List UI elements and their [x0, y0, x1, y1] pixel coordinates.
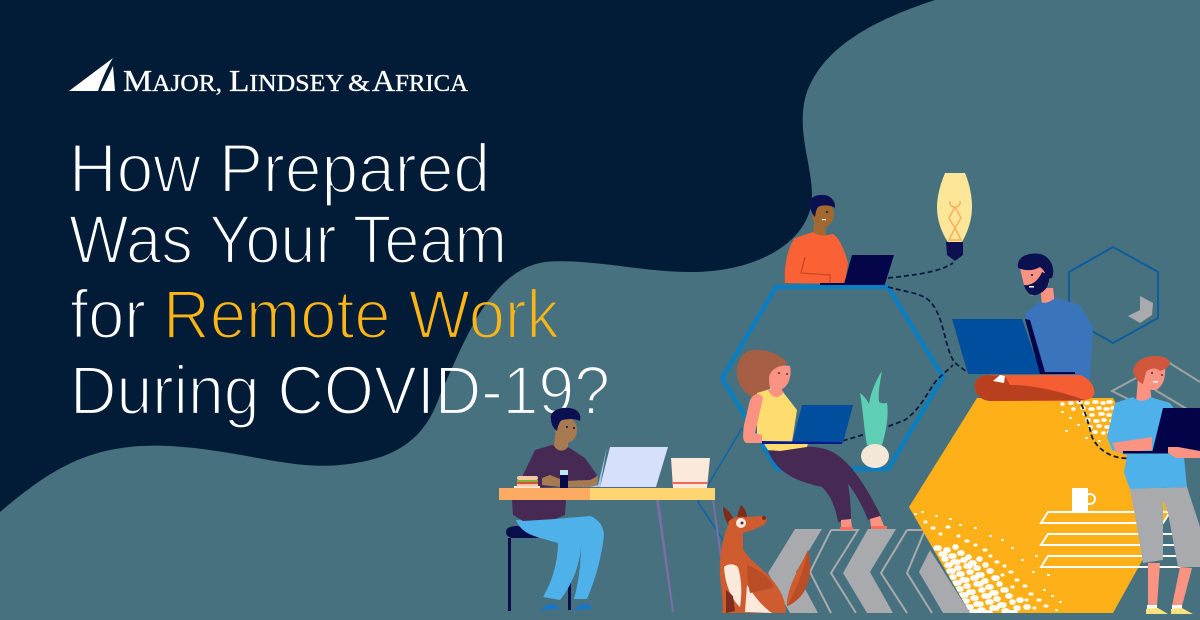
- logo wordmark: [123, 63, 469, 98]
- person: seated man at desk: [506, 408, 604, 611]
- neck and head: [554, 435, 568, 451]
- yellow hexagon: [909, 398, 1180, 613]
- desk: [499, 447, 722, 612]
- plant in pot: [860, 371, 889, 468]
- logo wordmark: MAJOR,: [123, 63, 222, 98]
- person: red-haired man standing with laptop: [1107, 356, 1200, 614]
- logo wordmark: LINDSEY: [229, 63, 344, 98]
- white speckles: [915, 402, 1113, 613]
- white coffee cup: [1072, 488, 1095, 511]
- person: woman on hexagon with laptop: [737, 350, 887, 530]
- title: for: [70, 276, 146, 353]
- title: Remote Work: [163, 276, 559, 353]
- small blue hexagon outline: [1069, 247, 1158, 343]
- title: During COVID-19?: [70, 352, 610, 429]
- shoes: [541, 604, 594, 610]
- arm: [542, 475, 598, 487]
- white desk stripes: [1041, 512, 1180, 567]
- grey chevron in small hexagon: [1128, 296, 1153, 323]
- cup: [671, 458, 710, 488]
- title: Was Your Team: [69, 201, 507, 278]
- person: bearded man cross-legged with laptop: [952, 254, 1094, 401]
- title: How Prepared: [69, 130, 490, 207]
- pants: [516, 516, 604, 600]
- fox dog: [720, 505, 810, 613]
- grey chevrons: [768, 529, 970, 613]
- shirt: [512, 445, 597, 521]
- person: man in orange with laptop: [785, 195, 894, 285]
- thin blue connector line: [698, 428, 742, 543]
- logo wordmark: AFRICA: [372, 63, 469, 98]
- light bulb: [937, 173, 972, 261]
- sandwich: [514, 476, 540, 488]
- laptop: [590, 447, 668, 487]
- dashed connectors: [835, 263, 1145, 458]
- logo wordmark: &: [348, 71, 370, 97]
- dark navy blob: [0, 0, 935, 512]
- blue hexagon outline: [722, 287, 943, 469]
- logo mark: sail: [69, 58, 115, 91]
- title: [69, 130, 610, 429]
- stool: [506, 526, 571, 611]
- grey hexagon outline behind man: [1112, 362, 1200, 428]
- logo: Major, Lindsey & Africa: [69, 58, 469, 98]
- glass: [560, 470, 568, 488]
